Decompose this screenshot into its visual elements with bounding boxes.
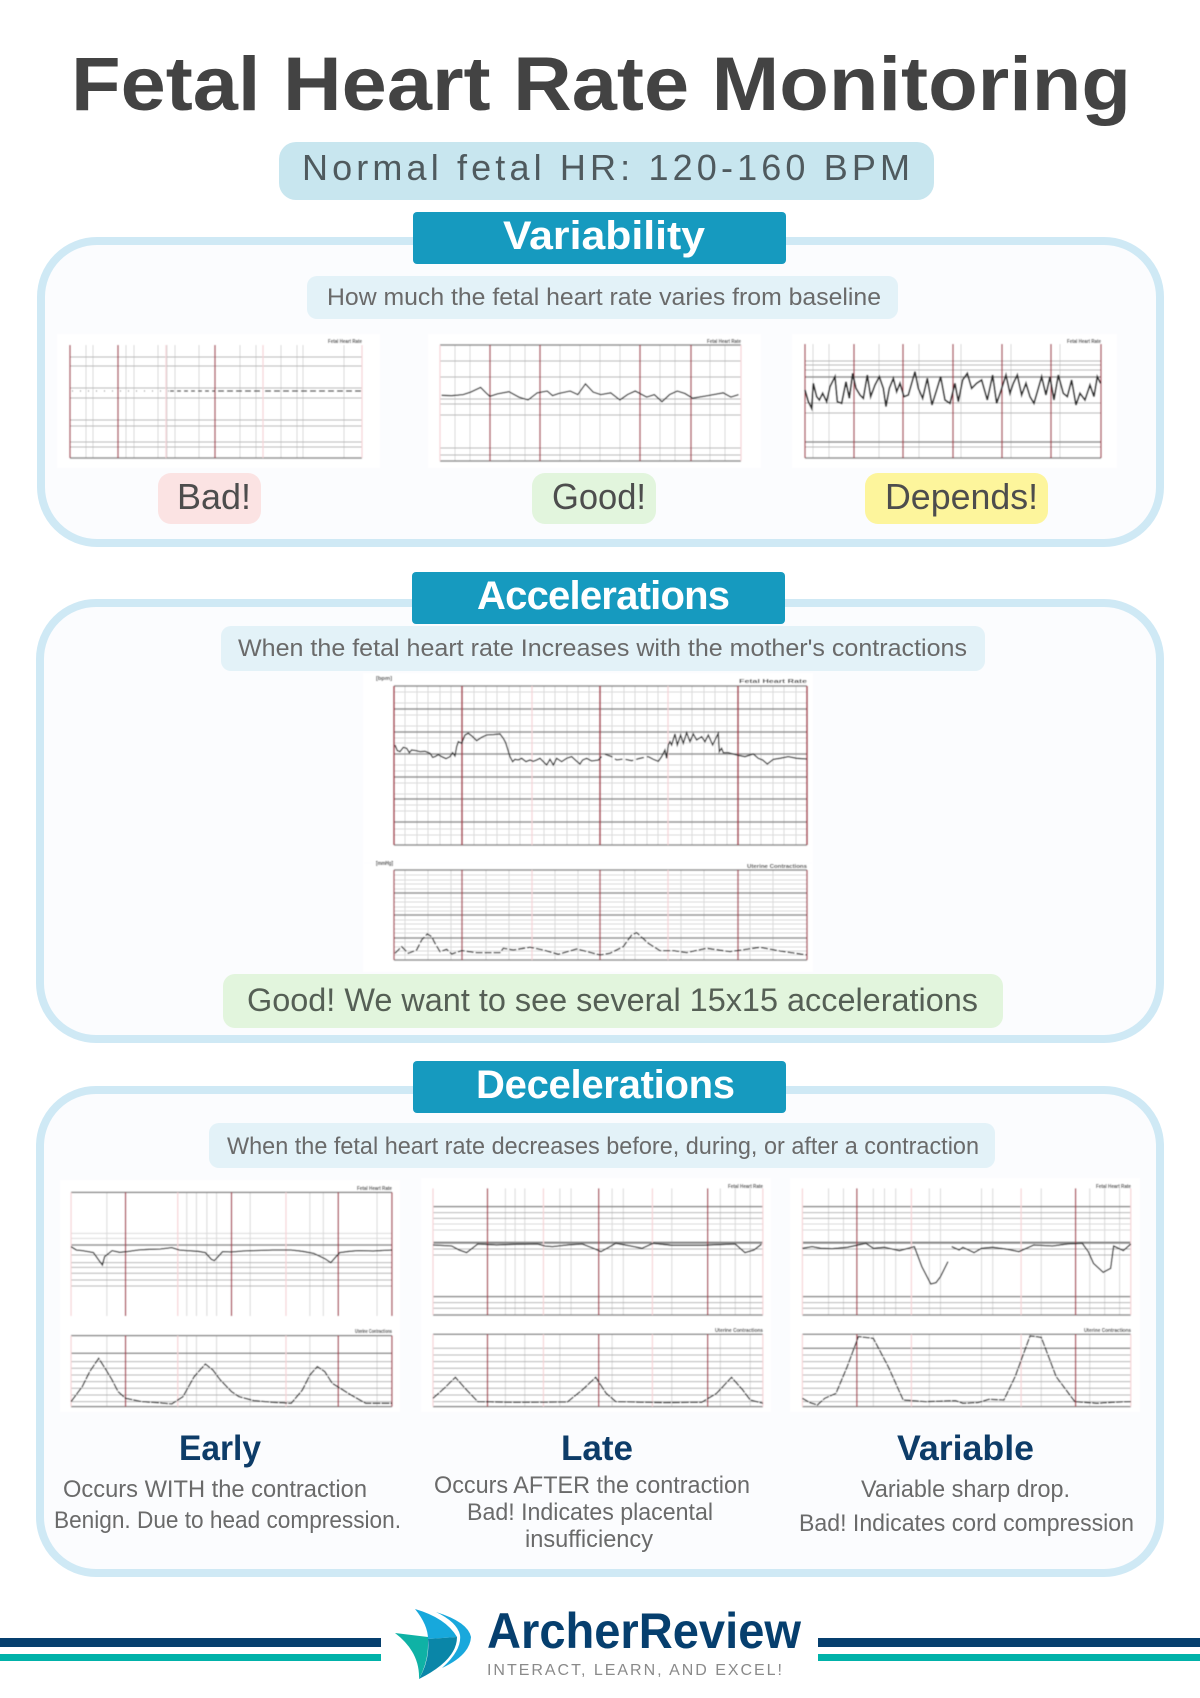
chart: fetal heart rate with accelerations: [bpm] — [376, 676, 392, 682]
heading: variability: Variability — [503, 214, 706, 258]
late deceleration text — [434, 1429, 750, 1553]
normal heart rate pill — [279, 142, 934, 200]
chart: minimal variability: Fetal Heart Rate — [328, 339, 362, 345]
variability description: How much the fetal heart rate varies from baseline — [327, 284, 881, 311]
label: depends: Depends! — [885, 476, 1038, 517]
label: good — [532, 473, 656, 524]
early deceleration text — [54, 1429, 401, 1534]
accelerations panel background — [40, 603, 1160, 1039]
heading: accelerations: Accelerations — [477, 574, 730, 618]
variable deceleration text: Variable sharp drop. — [861, 1476, 1070, 1503]
label: bad: Bad! — [177, 476, 251, 517]
early deceleration text: Benign. Due to head compression. — [54, 1507, 401, 1534]
chart: uterine contractions under accelerations: Uterine Contractions — [747, 864, 807, 870]
chart: late decelerations: Fetal Heart Rate — [728, 1184, 763, 1190]
late deceleration text: insufficiency — [525, 1526, 653, 1553]
variable deceleration text — [799, 1429, 1134, 1537]
title: Fetal Heart Rate Monitoring — [71, 42, 1131, 127]
chart: variable decelerations — [790, 1178, 1140, 1412]
label: depends — [865, 473, 1048, 524]
good callout: 15x15 accelerations — [223, 974, 1003, 1028]
tagline: INTERACT, LEARN, AND EXCEL! — [487, 1662, 782, 1679]
panel: variability — [41, 212, 1160, 543]
panel: decelerations — [40, 1061, 1160, 1573]
normal heart rate pill: Normal fetal HR: 120-160 BPM — [302, 147, 910, 188]
variability panel background — [41, 241, 1160, 543]
chart: early decelerations: Fetal Heart Rate — [357, 1186, 392, 1192]
chart: late decelerations: Uterine Contractions — [715, 1328, 763, 1334]
chart: variable decelerations: Fetal Heart Rate — [1096, 1184, 1131, 1190]
chart: variable decelerations: Uterine Contractions — [1084, 1328, 1131, 1334]
accelerations description: When the fetal heart rate Increases with the mother's contractions — [238, 635, 967, 662]
late deceleration text: Bad! Indicates placental — [467, 1499, 713, 1526]
archer review wordmark: ArcherReview — [487, 1603, 801, 1659]
chart: early decelerations: Uterine Contractions — [355, 1329, 392, 1335]
accelerations description — [221, 626, 985, 671]
decelerations panel background — [40, 1090, 1160, 1573]
chart: moderate variability: Fetal Heart Rate — [707, 339, 741, 345]
heading: accelerations — [412, 572, 785, 624]
chart: late decelerations — [421, 1178, 771, 1412]
decelerations description — [209, 1123, 995, 1168]
chart: moderate variability — [428, 334, 761, 468]
chart: marked variability: Fetal Heart Rate — [1067, 339, 1101, 345]
chart: uterine contractions under accelerations: [mmHg] — [376, 861, 393, 867]
icon: archer review sail logo — [395, 1609, 471, 1679]
label: good: Good! — [552, 476, 646, 517]
heading: decelerations — [413, 1061, 786, 1113]
panel: accelerations — [40, 572, 1160, 1039]
label: bad — [158, 473, 261, 524]
variability description — [307, 276, 898, 319]
heading: decelerations: Decelerations — [476, 1063, 735, 1107]
chart: early decelerations — [60, 1180, 400, 1412]
chart: fetal heart rate with accelerations: Fetal Heart Rate — [739, 679, 807, 685]
chart: uterine contractions under accelerations — [363, 861, 813, 972]
variable deceleration text: Variable — [897, 1429, 1034, 1468]
chart: fetal heart rate with accelerations — [363, 673, 813, 863]
good callout: 15x15 accelerations: Good! We want to see several 15x15 accelerations — [247, 982, 978, 1018]
heading: variability — [413, 212, 786, 264]
footer stripes right — [818, 1638, 1200, 1661]
late deceleration text: Late — [561, 1429, 633, 1468]
variable deceleration text: Bad! Indicates cord compression — [799, 1510, 1134, 1537]
late deceleration text: Occurs AFTER the contraction — [434, 1472, 750, 1499]
decelerations description: When the fetal heart rate decreases before, during, or after a contraction — [227, 1133, 979, 1160]
chart: marked variability — [792, 334, 1117, 468]
chart: minimal variability — [57, 334, 380, 468]
footer stripes left — [0, 1638, 381, 1661]
early deceleration text: Occurs WITH the contraction — [63, 1476, 367, 1503]
early deceleration text: Early — [179, 1429, 262, 1468]
